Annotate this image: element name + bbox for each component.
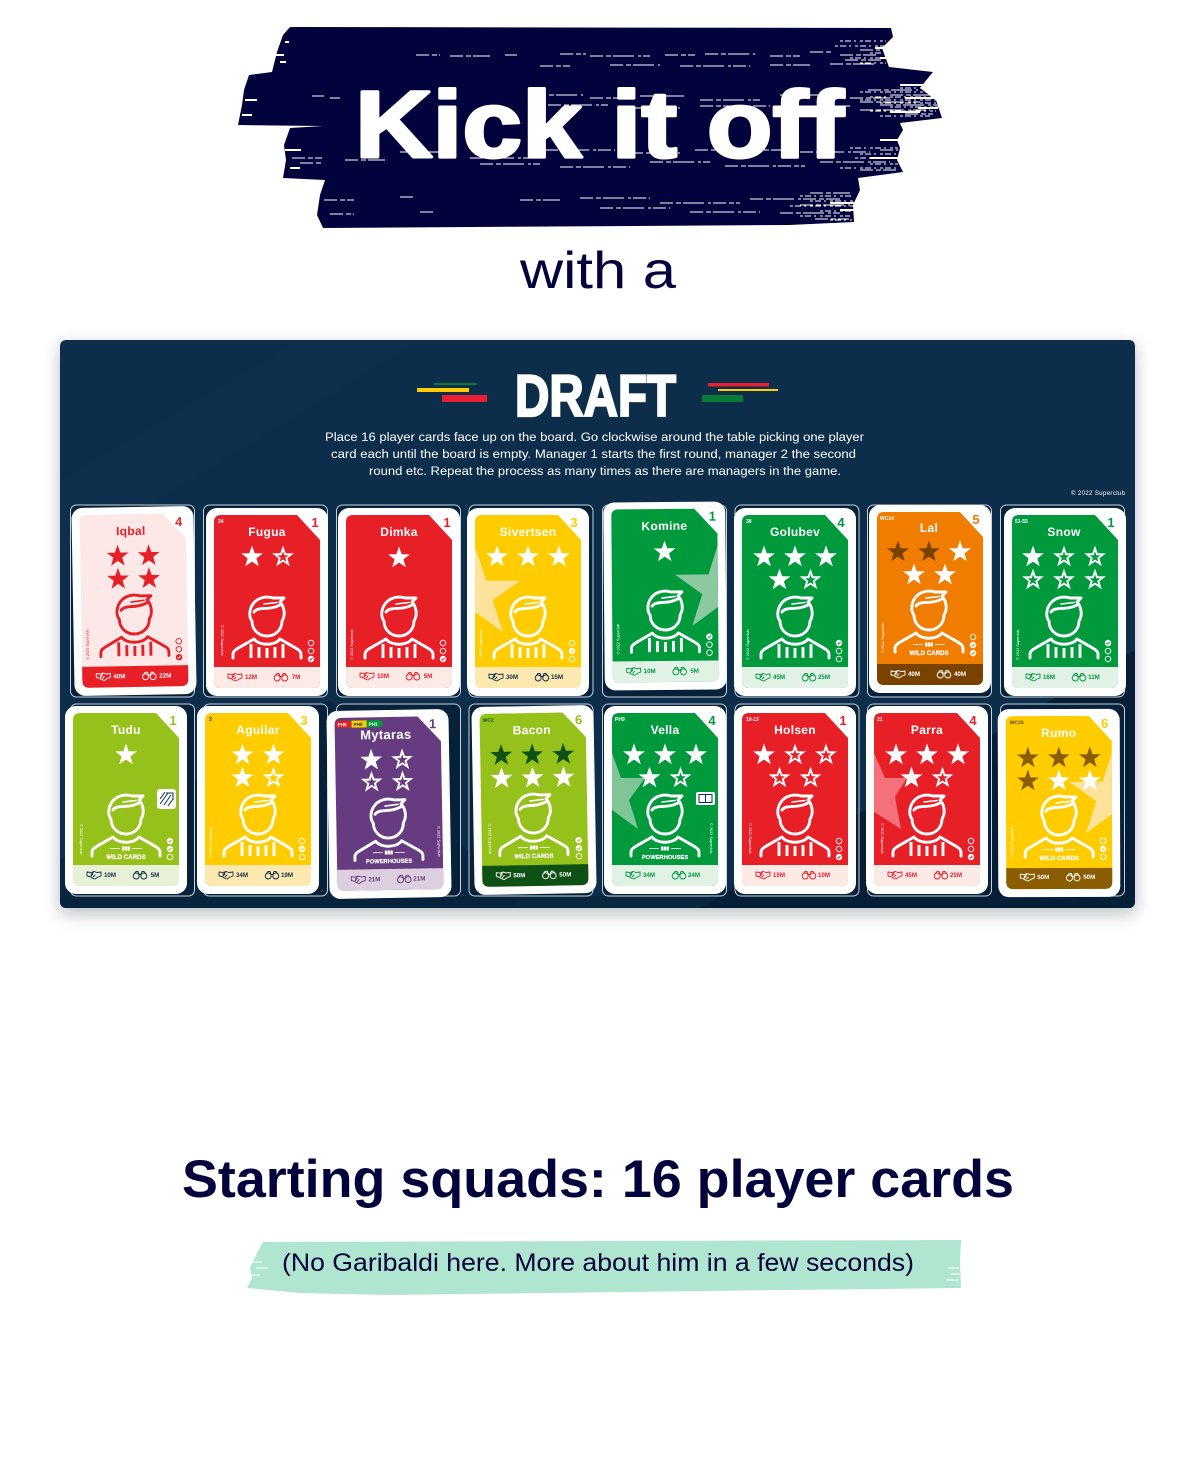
card: Tudu [65,706,187,894]
value: 4 [969,713,977,728]
card: Mytaras [326,709,452,899]
copyright: © 2022 Superclub [1071,490,1126,497]
player icon [224,795,292,856]
stats: 34M [643,872,655,879]
ability icon [157,789,176,809]
stats: 7M [292,674,300,681]
name: Fugua [248,525,286,539]
checks [575,837,582,859]
note text: (No Garibaldi here. More about him in a few seconds) [282,1249,914,1277]
background star [1069,753,1112,833]
code: 10-13 [746,717,759,723]
stats: 24M [688,872,700,879]
player icon [499,794,568,856]
stats: 50M [559,871,571,879]
player icon [761,597,829,658]
stats: 30M [506,674,518,681]
copyright: © 2022 Superclub [209,828,213,858]
stars [232,744,284,787]
player icon [365,597,433,658]
name: Snow [1047,525,1081,539]
stats: 45M [773,674,785,681]
checks [836,640,842,662]
background star [675,546,718,626]
name: Holsen [774,723,816,737]
stars [753,546,837,589]
stats [627,667,699,675]
code: WC2 [483,718,494,724]
card: Iqbal [71,506,197,696]
name: Bacon [513,723,551,737]
value: 1 [839,713,847,728]
value: 1 [429,716,436,731]
card: Snow [1004,508,1126,696]
name: Mytaras [360,727,412,742]
value: 4 [708,713,716,728]
stars [1022,546,1106,589]
card: Sivertsen [467,508,589,696]
stats: 5M [690,668,699,675]
stats: 11M [1088,674,1100,681]
card: Dimka [338,508,460,696]
name: Tudu [111,723,141,737]
stats [96,672,171,681]
checks [175,638,182,660]
checks [167,838,173,860]
wild cards badge [909,643,949,657]
powerhouses badge: POWERHOUSES [642,855,688,861]
copyright: © 2022 Superclub [479,630,483,660]
stats [891,670,966,678]
draft instructions: round etc. Repeat the process as many times as there are managers in the game. [369,464,841,478]
stars [490,743,575,788]
checks [1100,838,1106,860]
copyright: © 2022 Superclub [436,826,441,857]
card: Lal [869,505,991,693]
card: Golubev [734,508,856,696]
stats: 50M [1083,874,1095,881]
name: Dimka [380,525,418,539]
copyright: © 2022 Superclub [487,824,492,854]
stats: 22M [159,672,171,680]
stats: 10M [104,872,116,879]
copyright: © 2022 Superclub [880,823,884,853]
value: 1 [709,509,716,524]
stats [489,674,563,681]
stats: 25M [818,674,830,681]
copyright: © 2022 Superclub [85,629,90,660]
stats: 50M [513,872,525,879]
brush stroke behind title [238,27,942,228]
player icon [494,597,562,658]
code: 51-55 [1015,519,1028,525]
value: 5 [972,512,980,527]
stats [756,674,830,681]
value: 3 [300,713,308,728]
code: WC25 [1010,720,1024,726]
code: WC14 [880,516,894,522]
stats: 12M [245,674,257,681]
checks [569,640,575,662]
checks [706,633,713,655]
background star [475,549,520,632]
stats: 10M [377,673,389,680]
subtitle: with a [519,242,676,300]
name: Golubev [770,525,820,539]
stats: 45M [905,872,917,879]
player icon [631,591,699,652]
checks [1105,640,1111,662]
star [654,540,676,561]
powerhouse chips: PH8 [354,722,363,727]
panel: draft board [60,340,1157,908]
stats: 19M [281,872,293,879]
copyright: © 2022 Superclub [79,824,83,854]
checks [308,640,314,662]
card slots [70,505,1124,896]
player icon [1025,796,1093,857]
name: Rumo [1041,726,1076,740]
copyright: © 2022 Superclub [1016,630,1020,660]
ability icon [696,792,715,805]
player icon [893,795,961,856]
card: Parra [866,706,988,894]
card: Holsen [734,706,856,894]
card: Vella [604,706,726,894]
star [388,546,410,567]
code: PH9 [615,717,625,723]
title: Kick it off [355,72,844,178]
stars [1017,746,1101,790]
powerhouses badge [642,847,688,861]
copyright: © 2022 Superclub [220,625,224,655]
copyright: © 2022 Superclub [616,624,621,654]
stats [888,872,962,879]
stats [496,871,571,880]
name: Parra [911,723,943,737]
stars [360,748,414,792]
draft instructions: Place 16 player cards face up on the board. Go clockwise around the table picking one player [325,430,864,444]
name: Lal [920,521,938,535]
value: 1 [1107,515,1115,530]
stats [87,872,159,879]
checks [299,838,305,860]
player icon [631,795,699,856]
name: Vella [651,723,679,737]
card: Fugua [206,508,328,696]
background star [874,753,907,829]
stats: 40M [954,671,966,678]
value: 4 [837,515,845,530]
stats [360,672,432,680]
stars [241,546,294,566]
wild cards badge: WILD CARDS [106,854,146,861]
draft instructions [325,430,864,478]
wild cards badge: WILD CARDS [514,853,554,860]
stars [107,544,160,589]
name: Iqbal [116,524,146,538]
copyright: © 2022 Superclub [350,630,354,660]
stats [1026,674,1100,681]
stats [351,875,425,884]
value: 1 [443,515,451,530]
checks [836,838,842,860]
stats [756,872,830,879]
checks [968,838,974,860]
powerhouse chips: PH6 [338,722,347,727]
stats: 15M [773,872,785,879]
stats: 15M [551,674,563,681]
player icon [92,795,160,856]
wild cards badge: WILD CARDS [909,650,949,657]
stars [885,744,969,787]
stats: 10M [818,872,830,879]
stats: 40M [908,671,920,678]
copyright: © 2022 Superclub [709,823,713,853]
powerhouse chips [336,720,383,728]
name: Aguilar [236,723,280,737]
wild cards badge [1039,848,1079,862]
stats: 16M [1043,674,1055,681]
stats: 21M [413,875,425,883]
value: 4 [175,514,183,529]
value: 1 [169,713,177,728]
draft heading: DRAFT [515,364,676,429]
copyright: © 2022 Superclub [748,823,752,853]
name: Komine [641,519,687,533]
stats [626,872,700,879]
stats: 5M [424,673,432,680]
stats: 25M [950,872,962,879]
stats [228,674,300,681]
card: Aguilar [197,706,319,894]
value: 6 [1101,716,1108,731]
copyright: © 2022 Superclub [881,623,885,653]
accent lines left [417,383,487,402]
stars [753,744,837,787]
draft instructions: card each until the board is empty. Manager 1 starts the first round, manager 2 the second [331,447,856,461]
card: Bacon [471,705,597,895]
stats: 40M [113,673,125,680]
value: 6 [575,712,582,727]
stats [1020,873,1095,881]
stats: 5M [151,872,159,879]
powerhouses badge: POWERHOUSES [366,859,412,865]
player icon [100,594,169,657]
player icon [354,799,423,861]
stars [887,540,971,584]
checks [970,634,976,656]
player icon [895,591,963,652]
card: Rumo [998,708,1120,898]
code: 38 [746,519,752,525]
stats [219,872,293,879]
stats: 34M [236,872,248,879]
name: Sivertsen [500,525,556,539]
checks [440,640,446,662]
player icon [1030,597,1098,658]
player icon [233,597,301,658]
star [115,744,137,764]
value: 1 [311,515,319,530]
powerhouses badge [366,851,412,865]
stats: 21M [368,876,380,883]
copyright: © 2022 Superclub [1010,827,1014,857]
powerhouse chips: PH3 [369,722,378,727]
code: 21 [877,717,883,723]
value: 3 [570,515,578,530]
wild cards badge [514,846,554,860]
wild cards badge [106,847,146,861]
stats: 50M [1037,874,1049,881]
card: Komine [603,502,727,690]
player icon [761,795,829,856]
code: 3 [209,717,212,723]
code: 24 [218,519,224,525]
stats: 10M [644,668,656,675]
heading: starting squads: Starting squads: 16 player cards [182,1150,1014,1209]
copyright: © 2022 Superclub [746,630,750,660]
wild cards badge: WILD CARDS [1039,855,1079,862]
stars [486,546,570,566]
note banner [247,1240,961,1295]
stars [623,744,707,787]
accent lines right [702,383,778,402]
background star [612,753,645,829]
